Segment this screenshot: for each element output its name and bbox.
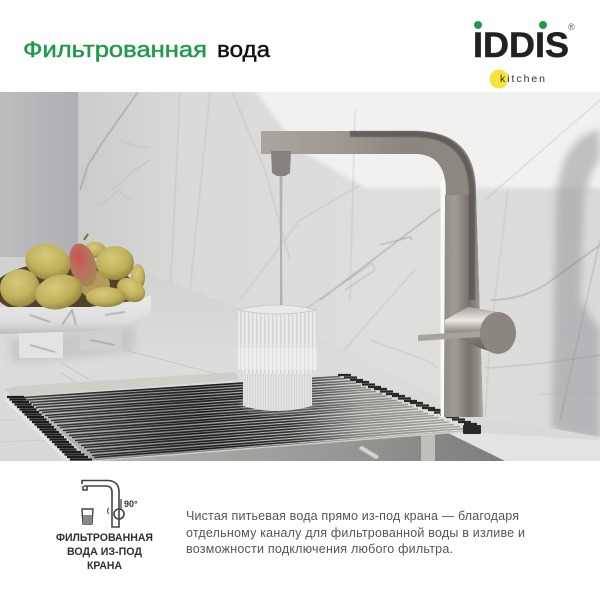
photo: kitchen sink with faucet: [0, 85, 600, 461]
marble veins: [80, 92, 600, 420]
logo: IDDIS kitchen: kitchen: [500, 73, 545, 85]
sink basin: [90, 433, 505, 461]
left background wall: [0, 92, 82, 257]
icon: faucet with filtered water glass: [82, 480, 138, 527]
roll-up drying mat: [6, 375, 481, 461]
logo: IDDIS kitchen: [473, 21, 575, 88]
description text: Чистая питьевая вода прямо из-под крана — благодаря: [186, 509, 519, 523]
title: вода: [217, 37, 271, 62]
icon caption: КРАНА: [87, 560, 122, 572]
faucet handle: [418, 307, 516, 354]
logo: IDDIS kitchen: IDDIS: [473, 26, 569, 65]
water stream: [280, 176, 282, 305]
icon caption: [56, 532, 153, 572]
description text: возможности подключения любого фильтра.: [186, 542, 453, 556]
counter top: [0, 257, 600, 461]
description text: [186, 509, 525, 556]
faucet body: [261, 131, 483, 417]
marble wall: [78, 85, 600, 442]
icon caption: ФИЛЬТРОВАННАЯ: [56, 532, 153, 544]
pears: [0, 234, 149, 315]
sink drain reflection: [360, 434, 435, 461]
description text: отдельному каналу для фильтрованной воды в изливе и: [186, 526, 525, 540]
mat near edge: [92, 431, 470, 461]
title: [23, 37, 271, 62]
icon caption: ВОДА ИЗ-ПОД: [67, 546, 142, 558]
mat left end caps: [7, 397, 92, 460]
faucet aerator: [271, 151, 291, 176]
faucet shadow on wall: [552, 130, 600, 440]
title: Фильтрованная: [23, 37, 207, 62]
sink rim strip behind mat: [4, 372, 238, 396]
logo: IDDIS kitchen: ®: [568, 22, 575, 32]
fruit bowl: [0, 234, 151, 362]
mat right end caps: [338, 375, 477, 424]
glass of water: [238, 305, 317, 416]
icon: faucet with filtered water glass: 90°: [124, 499, 138, 509]
